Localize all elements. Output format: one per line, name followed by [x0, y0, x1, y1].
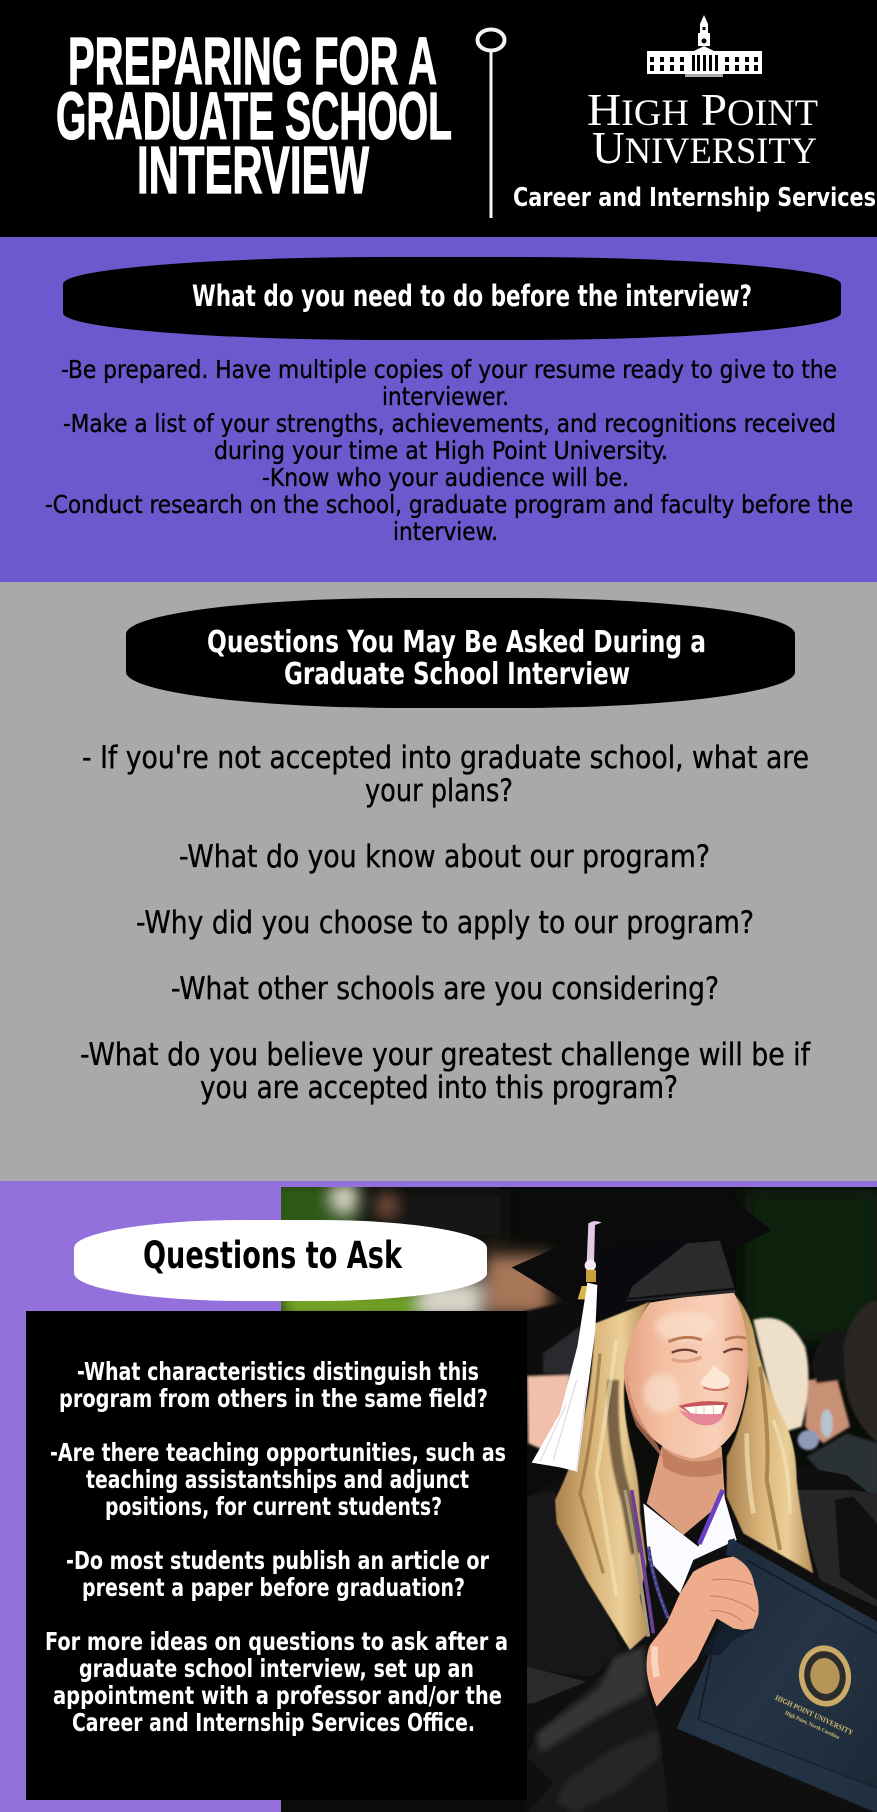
- tassel: [532, 1221, 602, 1472]
- hand and diploma folder: [647, 1538, 877, 1812]
- heading pill: Graduate School Interview: [284, 657, 630, 692]
- preparation list: -Make a list of your strengths, achievements, and recognitions received: [63, 409, 836, 438]
- hair: [555, 1302, 650, 1650]
- preparation list: [45, 355, 853, 546]
- preparation list: -Conduct research on the school, graduate program and faculty before the: [45, 490, 853, 519]
- question list: -What do you believe your greatest challenge will be if: [80, 1037, 811, 1073]
- preparation list: during your time at High Point University.: [214, 436, 668, 465]
- answer box: Career and Internship Services Office.: [72, 1708, 475, 1737]
- answer box: teaching assistantships and adjunct: [86, 1465, 469, 1494]
- panel: questions to ask: [0, 1180, 877, 1812]
- title: INTERVIEW: [137, 133, 369, 208]
- question list: -What do you know about our program?: [179, 839, 710, 875]
- university wordmark: UNIVERSITY: [592, 122, 817, 173]
- folder imprint: High Point, North Carolina: [784, 1710, 840, 1741]
- title: GRADUATE SCHOOL: [56, 79, 452, 154]
- graduate photo illustration: [270, 1180, 877, 1812]
- answer box: present a paper before graduation?: [82, 1573, 465, 1602]
- header panel: [0, 0, 877, 237]
- mortarboard cap: [512, 1208, 772, 1302]
- answer box: -Do most students publish an article or: [66, 1546, 490, 1575]
- background graduates: [523, 1298, 877, 1500]
- question list: - If you're not accepted into graduate school, what are: [82, 740, 809, 776]
- answer box: -Are there teaching opportunities, such as: [50, 1438, 506, 1467]
- neck: [647, 1447, 725, 1535]
- heading pill: questions to ask: Questions to Ask: [143, 1234, 403, 1277]
- folder imprint: HIGH POINT UNIVERSITY: [774, 1693, 855, 1737]
- question list: -Why did you choose to apply to our program?: [136, 905, 754, 941]
- answer box: [26, 1311, 527, 1800]
- answer box: positions, for current students?: [105, 1492, 442, 1521]
- answer box: graduate school interview, set up an: [79, 1654, 474, 1683]
- preparation list: interviewer.: [382, 382, 509, 411]
- heading pill: [63, 257, 841, 340]
- university seal: [798, 1645, 852, 1707]
- question list: [80, 740, 811, 1106]
- question list: your plans?: [365, 773, 513, 809]
- collar: [625, 1490, 737, 1637]
- answer box: program from others in the same field?: [59, 1384, 488, 1413]
- heading pill: Questions You May Be Asked During a: [207, 625, 706, 660]
- cords: [625, 1490, 668, 1637]
- preparation list: interview.: [393, 517, 498, 546]
- preparation list: -Know who your audience will be.: [262, 463, 629, 492]
- face: [624, 1293, 748, 1458]
- heading pill: [126, 598, 795, 708]
- gown: [818, 1470, 868, 1492]
- question list: -What other schools are you considering?: [171, 971, 719, 1007]
- answer box: -What characteristics distinguish this: [77, 1357, 479, 1386]
- preparation list: -Be prepared. Have multiple copies of your resume ready to give to the: [61, 355, 837, 384]
- heading pill: What do you need to do before the interview?: [192, 279, 752, 313]
- panel: questions you may be asked: [0, 582, 877, 1182]
- question list: you are accepted into this program?: [200, 1070, 678, 1106]
- answer box: For more ideas on questions to ask after a: [45, 1627, 508, 1656]
- divider pin: [478, 30, 504, 218]
- heading pill: questions to ask: [74, 1220, 487, 1301]
- university wordmark: [587, 84, 818, 173]
- icon: university building: [647, 15, 762, 77]
- answer box: appointment with a professor and/or the: [53, 1681, 502, 1710]
- title: PREPARING FOR A: [68, 24, 437, 99]
- panel: before the interview: [0, 237, 877, 582]
- university wordmark: HIGH POINT: [587, 84, 818, 135]
- title: [56, 24, 452, 208]
